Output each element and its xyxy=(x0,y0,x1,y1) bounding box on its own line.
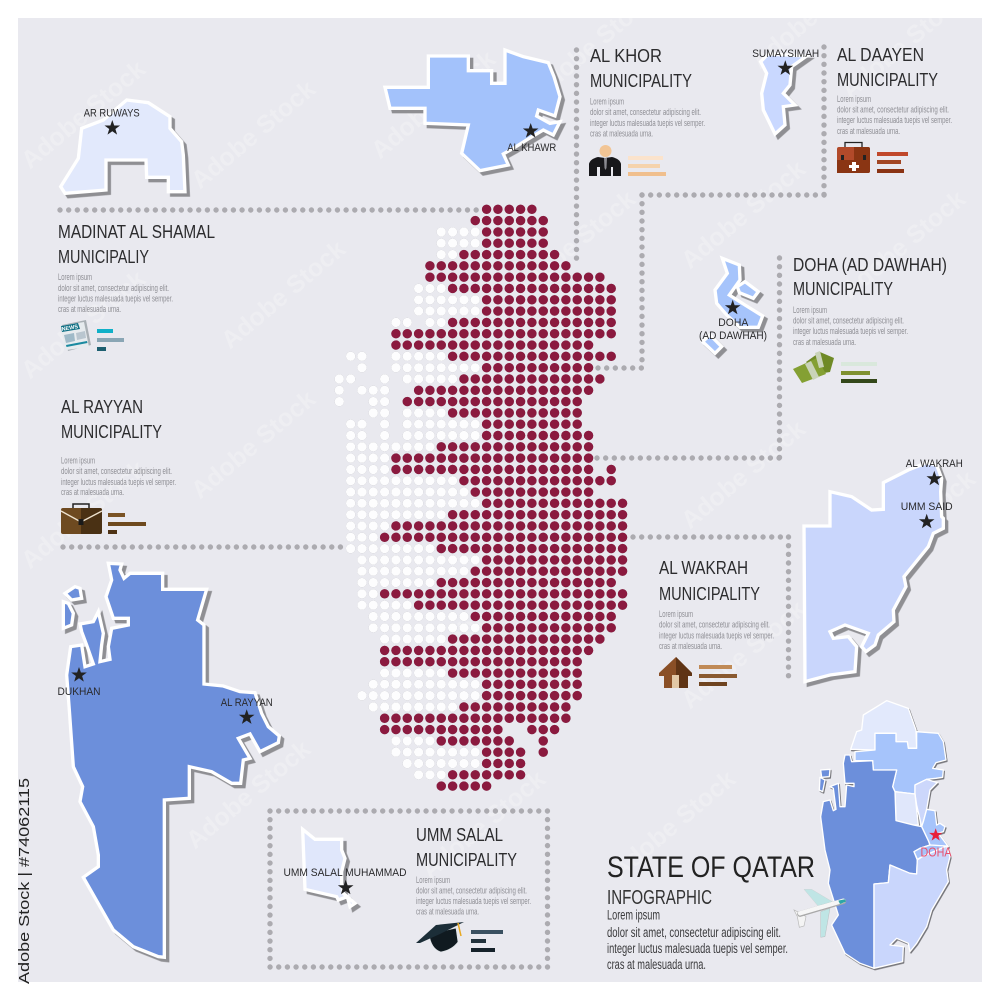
heading: MUNICIPALITY xyxy=(416,850,517,870)
dot map of Qatar in flag colours xyxy=(339,209,623,786)
icon: newspaper: NEWS xyxy=(61,324,79,333)
islands xyxy=(821,769,830,777)
heading: AL KHOR xyxy=(590,46,662,66)
icon: graduation cap xyxy=(416,922,464,952)
body text: cras at malesuada urna. xyxy=(793,337,856,348)
region: Al Daayen xyxy=(915,779,937,827)
body text: cras at malesuada urna. xyxy=(416,906,479,918)
stock watermark: Adobe Stock xyxy=(846,465,981,585)
icon: medical case xyxy=(837,142,870,173)
heading: AL RAYYAN xyxy=(61,397,143,417)
heading: AL WAKRAH xyxy=(659,558,748,578)
map: Al Wakrah: AL WAKRAH xyxy=(906,458,963,470)
bars xyxy=(699,665,737,686)
body text xyxy=(416,875,531,918)
map: Al Khor xyxy=(385,50,560,171)
body text: integer luctus malesuada tuepis vel semper. xyxy=(61,477,176,488)
region: Al Khor xyxy=(855,732,946,794)
body text: Lorem ipsum xyxy=(58,272,92,283)
body text: Lorem ipsum xyxy=(61,456,95,466)
icon: house xyxy=(659,657,692,688)
heading: DOHA (AD DAWHAH) xyxy=(793,255,947,275)
body text: cras at malesuada urna. xyxy=(659,641,722,652)
stock watermark: Adobe Stock xyxy=(181,735,316,855)
body text: Lorem ipsum xyxy=(837,94,871,105)
white dots xyxy=(339,232,475,775)
icon: businessman xyxy=(589,145,621,176)
body text xyxy=(58,272,173,315)
block: Al Wakrah Municipality xyxy=(659,558,774,688)
body text xyxy=(793,305,908,348)
region: Doha xyxy=(922,809,948,847)
stock watermark: Adobe Stock xyxy=(366,45,501,165)
maroon dots xyxy=(385,209,623,786)
heading xyxy=(659,558,760,604)
heading: MUNICIPALITY xyxy=(590,71,692,91)
map: Al Wakrah xyxy=(804,458,963,682)
bars xyxy=(841,362,877,383)
bars xyxy=(877,152,908,173)
body text: dolor sit amet, consectetur adipiscing elit. xyxy=(659,620,770,630)
body text: integer luctus malesuada tuepis vel semper. xyxy=(58,294,173,304)
description: cras at malesuada urna. xyxy=(607,957,706,972)
stock watermark: Adobe Stock xyxy=(606,765,741,885)
map: Sumaysimah: SUMAYSIMAH xyxy=(752,48,819,60)
block: Doha Municipality xyxy=(793,255,947,383)
heading: UMM SALAL xyxy=(416,825,503,845)
bars xyxy=(97,329,124,351)
body text: Lorem ipsum xyxy=(590,96,624,108)
map: Ar Ruways xyxy=(61,100,185,193)
map: Al Rayyan xyxy=(58,563,279,957)
stock watermark: Adobe Stock xyxy=(416,765,551,885)
subtitle: INFOGRAPHIC xyxy=(607,887,712,909)
body text: Lorem ipsum xyxy=(416,875,450,886)
body text: cras at malesuada urna. xyxy=(61,487,124,498)
bars xyxy=(628,156,666,176)
block: Al Daayen Municipality xyxy=(837,45,952,173)
icon: briefcase xyxy=(61,504,102,534)
image id side label: Adobe Stock | #74062115 xyxy=(16,778,33,984)
body text xyxy=(61,456,176,498)
heading: MADINAT AL SHAMAL xyxy=(58,222,215,242)
stock watermark: Adobe Stock xyxy=(216,235,351,355)
body text xyxy=(590,96,705,140)
map: Doha: DOHA xyxy=(718,317,749,329)
body text: cras at malesuada urna. xyxy=(837,126,900,137)
body text: dolor sit amet, consectetur adipiscing elit. xyxy=(61,466,172,477)
map: Al Khor: AL KHAWR xyxy=(507,142,556,154)
map: Umm Salal: UMM SALAL MUHAMMAD xyxy=(284,867,407,879)
body text: Lorem ipsum xyxy=(659,609,693,620)
stock watermark: Adobe Stock xyxy=(676,415,811,535)
body text xyxy=(659,609,774,652)
main title: STATE OF QATAR xyxy=(607,851,815,884)
overview map of Qatar xyxy=(819,701,950,968)
heading: MUNICIPALITY xyxy=(837,70,938,90)
map: Al Rayyan: DUKHAN xyxy=(58,686,101,698)
heading xyxy=(590,46,692,91)
map: Doha xyxy=(699,258,767,353)
stock watermark: Adobe Stock xyxy=(676,155,811,275)
heading xyxy=(793,255,947,299)
body text: integer luctus malesuada tuepis vel semper. xyxy=(659,630,774,642)
heading xyxy=(58,222,215,267)
map: Sumaysimah xyxy=(752,48,819,134)
capital marker: Doha: DOHA xyxy=(920,846,952,860)
stock watermark: Adobe Stock xyxy=(676,595,811,715)
dotted connector lines xyxy=(60,47,825,967)
body text: integer luctus malesuada tuepis vel semper. xyxy=(793,326,908,337)
icon: newspaper xyxy=(60,320,91,351)
map: Ar Ruways: AR RUWAYS xyxy=(84,108,140,120)
stock watermark: Adobe Stock xyxy=(416,555,551,675)
stock watermark: Adobe Stock xyxy=(16,265,151,385)
block: Al Rayyan Municipality xyxy=(61,397,176,534)
map: Umm Salal xyxy=(284,829,407,907)
heading: AL DAAYEN xyxy=(837,45,924,65)
heading: MUNICIPALIY xyxy=(58,247,149,267)
block: Al Khor Municipality xyxy=(589,46,705,176)
body text: dolor sit amet, consectetur adipiscing elit. xyxy=(416,886,527,896)
stock watermark: Adobe Stock xyxy=(16,455,151,575)
map: Doha: (AD DAWHAH) xyxy=(699,330,767,342)
body text xyxy=(837,94,952,137)
heading xyxy=(416,825,517,870)
icon: airplane xyxy=(794,889,846,937)
body text: integer luctus malesuada tuepis vel semper. xyxy=(590,118,705,129)
region: Doha south xyxy=(914,845,947,859)
description xyxy=(607,908,788,972)
region: Umm Salal xyxy=(895,792,918,825)
description: integer luctus malesuada tuepis vel semper. xyxy=(607,941,788,956)
body text: cras at malesuada urna. xyxy=(590,128,653,140)
stock watermark: Adobe Stock xyxy=(186,75,321,195)
bars xyxy=(471,930,503,952)
map: Al Rayyan: AL RAYYAN xyxy=(221,697,273,709)
region: Ar Ruways xyxy=(851,701,917,750)
heading xyxy=(837,45,938,90)
stock watermark: Adobe Stock xyxy=(836,185,971,305)
body text: Lorem ipsum xyxy=(793,305,827,316)
map: Al Wakrah: UMM SAID xyxy=(901,501,953,513)
heading: MUNICIPALITY xyxy=(793,279,893,299)
body text: dolor sit amet, consectetur adipiscing elit. xyxy=(793,316,904,326)
body text: cras at malesuada urna. xyxy=(58,304,121,315)
description: Lorem ipsum xyxy=(607,908,660,922)
heading xyxy=(61,397,162,442)
title block: State of Qatar xyxy=(607,851,815,972)
block: Madinat Al Shamal Municipaliy xyxy=(58,222,215,351)
stock watermark: Adobe Stock xyxy=(506,185,641,305)
stock watermark: Adobe Stock xyxy=(16,55,151,175)
body text: dolor sit amet, consectetur adipiscing elit. xyxy=(590,107,701,118)
heading: MUNICIPALITY xyxy=(61,422,162,442)
body text: dolor sit amet, consectetur adipiscing elit. xyxy=(58,283,169,294)
capital marker: Doha xyxy=(920,828,952,860)
block: Umm Salal Municipality xyxy=(416,825,531,952)
bars xyxy=(108,513,146,534)
heading: MUNICIPALITY xyxy=(659,584,760,604)
description: dolor sit amet, consectetur adipiscing elit. xyxy=(607,925,781,940)
stock watermark: Adobe Stock xyxy=(186,385,321,505)
region: Al Rayyan xyxy=(821,755,930,968)
stock watermark: Adobe Stock xyxy=(56,595,191,715)
body text: integer luctus malesuada tuepis vel semper. xyxy=(416,896,531,907)
icon: banknotes xyxy=(793,351,834,383)
region: Al Wakrah xyxy=(874,846,950,968)
